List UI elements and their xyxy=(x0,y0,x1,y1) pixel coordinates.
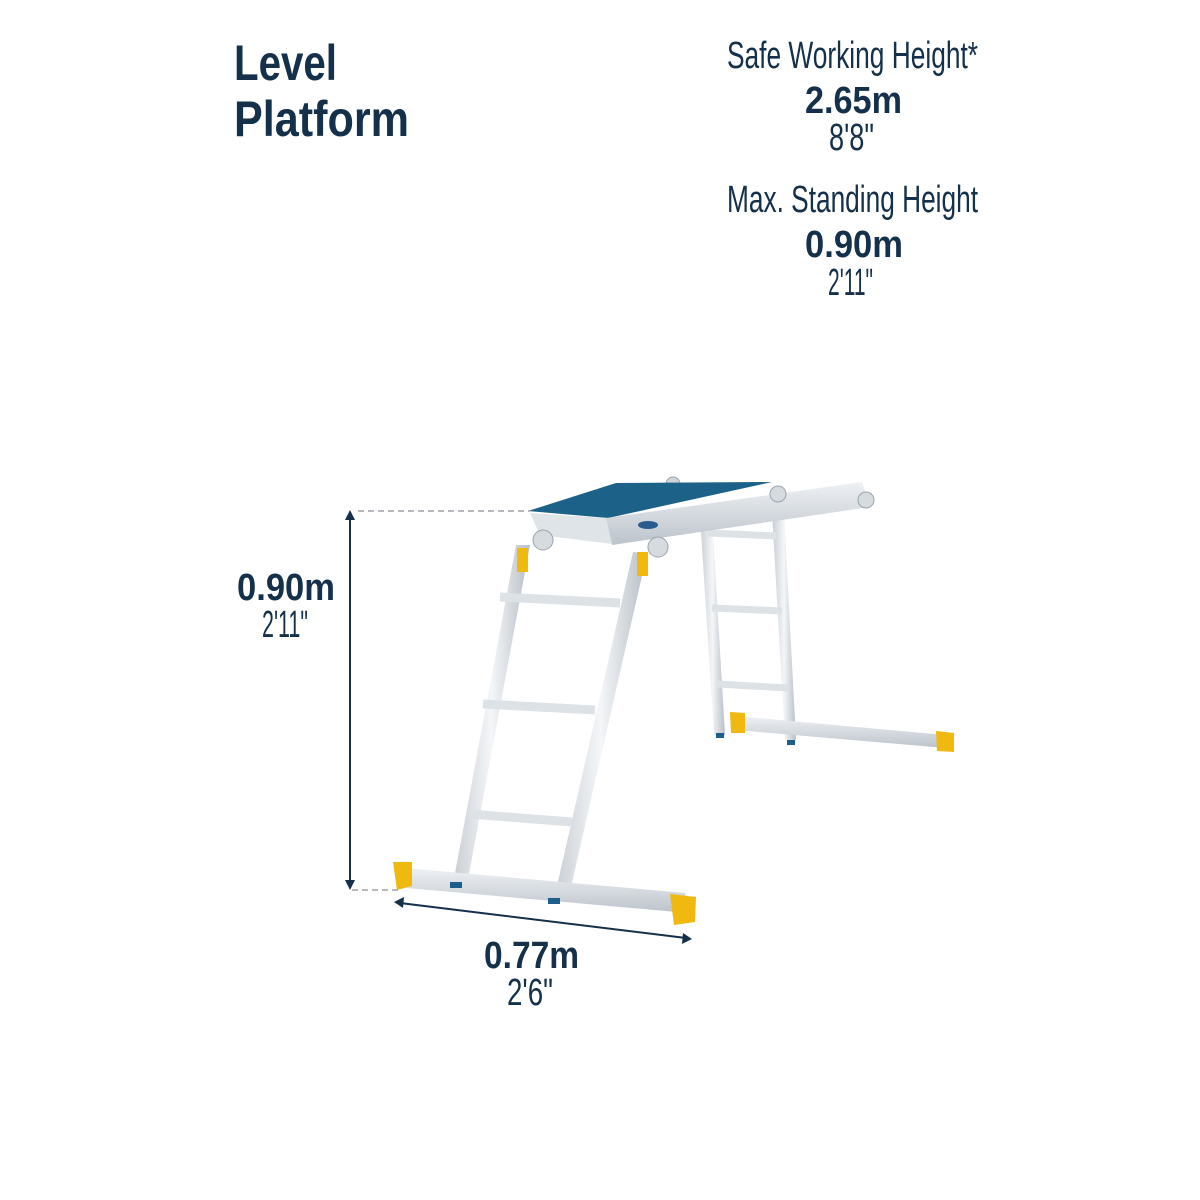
spec: max standing height: 2'11" xyxy=(828,262,873,304)
dimension: height label xyxy=(237,567,335,646)
spec: safe working height: Safe Working Height* xyxy=(727,35,978,77)
spec: safe working height xyxy=(727,35,978,159)
ladder: platform xyxy=(528,477,874,557)
dimension: width arrow xyxy=(394,897,692,944)
title xyxy=(234,35,409,147)
dimension: height label: 0.90m xyxy=(237,567,335,609)
dimension: width label: 0.77m xyxy=(484,935,579,977)
spec: max standing height: 0.90m xyxy=(805,224,903,266)
dimension: width label xyxy=(484,935,579,1014)
dimension: height label: 2'11" xyxy=(262,604,308,646)
title: Level xyxy=(234,35,337,91)
ladder: right section xyxy=(700,512,954,752)
title: Platform xyxy=(234,91,409,147)
dimension: height arrow xyxy=(345,510,530,890)
spec: max standing height xyxy=(727,179,978,304)
spec: max standing height: Max. Standing Height xyxy=(727,179,978,221)
dimension: width label: 2'6" xyxy=(507,972,553,1014)
ladder: left section xyxy=(393,545,696,925)
spec: safe working height: 8'8" xyxy=(829,117,874,159)
spec: safe working height: 2.65m xyxy=(805,80,902,122)
